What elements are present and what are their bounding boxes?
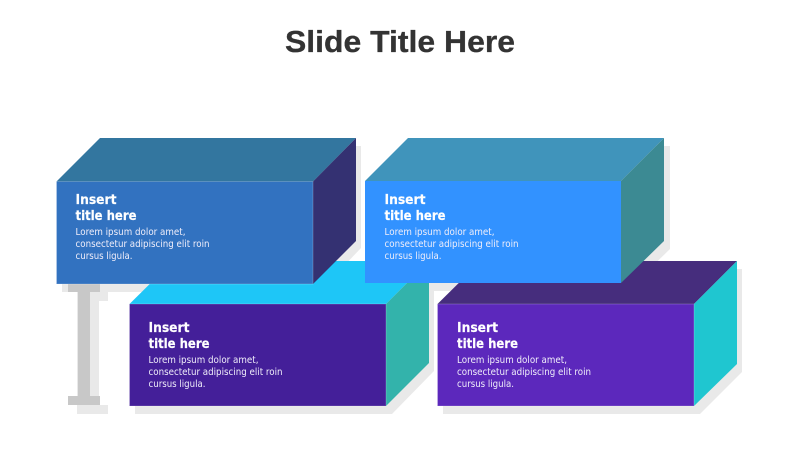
text: bottom right heading line two: title here bbox=[457, 337, 518, 352]
text: top right body: cursus ligula. bbox=[384, 251, 442, 262]
text: top right body: consectetur adipiscing elit roin bbox=[384, 239, 518, 250]
panel: box bottom left bbox=[130, 261, 429, 406]
text: top left heading line two: title here bbox=[76, 209, 137, 224]
text: top right heading line two: title here bbox=[384, 209, 446, 224]
panel: box top left bbox=[56, 138, 356, 284]
text: top right heading: Insert bbox=[384, 193, 426, 208]
text: top right body bbox=[384, 227, 518, 262]
text: bottom right body: cursus ligula. bbox=[457, 379, 514, 390]
title: Slide Title Here bbox=[285, 24, 515, 59]
text: bottom left body: consectetur adipiscing elit roin bbox=[148, 367, 282, 378]
text: bottom left body bbox=[148, 355, 282, 390]
text: bottom right body: consectetur adipiscing elit roin bbox=[457, 367, 591, 378]
text: top left body bbox=[76, 227, 210, 262]
text: bottom left body: cursus ligula. bbox=[148, 379, 206, 390]
pillar bbox=[68, 284, 100, 405]
text: bottom left heading: Insert bbox=[148, 321, 190, 336]
text: bottom right body bbox=[457, 355, 591, 390]
text: top right body: Lorem ipsum dolor amet, bbox=[384, 227, 494, 238]
text: bottom right body: Lorem ipsum dolor amet, bbox=[457, 355, 567, 366]
drop shadows bbox=[62, 146, 742, 414]
text: top left body: cursus ligula. bbox=[76, 251, 132, 262]
panel: box top right bbox=[365, 138, 664, 283]
text: top left body: Lorem ipsum dolor amet, bbox=[76, 227, 186, 238]
text: top left body: consectetur adipiscing elit roin bbox=[76, 239, 210, 250]
text: bottom right heading: Insert bbox=[457, 321, 498, 336]
text: bottom left body: Lorem ipsum dolor amet, bbox=[148, 355, 258, 366]
panel: box bottom right bbox=[438, 261, 737, 406]
text: bottom left heading line two: title here bbox=[148, 337, 210, 352]
text: top left heading: Insert bbox=[76, 193, 116, 208]
